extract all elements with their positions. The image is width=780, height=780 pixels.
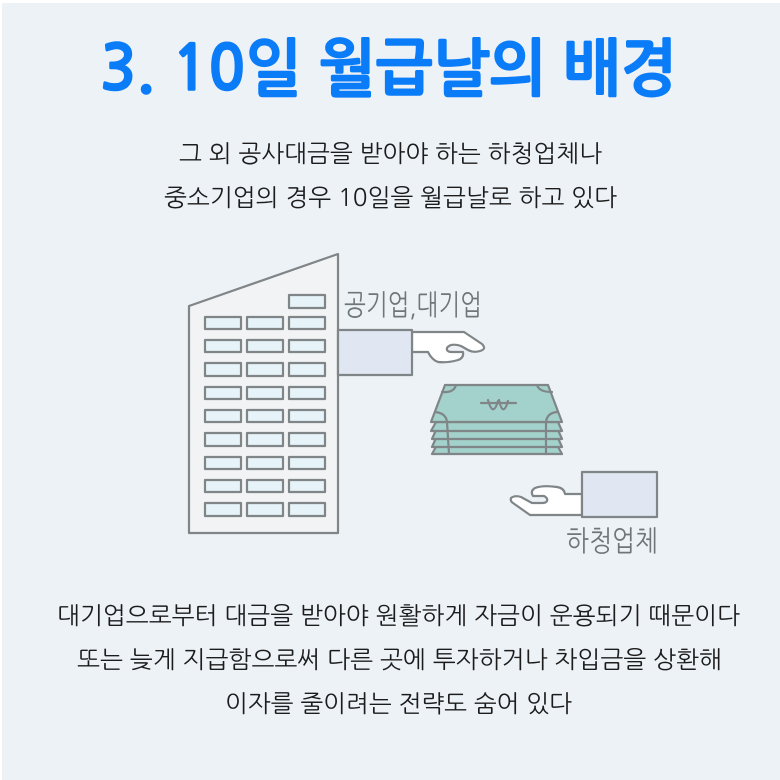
intro text: 그 외 공사대금을 받아야 하는 하청업체나 [179,141,602,166]
title: 3. 10일 월급날의 배경 [100,37,677,100]
icon: office building [189,254,338,533]
closing text: 이자를 줄이려는 전략도 숨어 있다 [225,692,572,716]
label: 하청업체: 하청업체 [566,526,658,555]
intro text [164,141,617,210]
icon: stack of won banknotes [431,385,562,454]
label: 공기업, 대기업: 공기업,대기업 [344,290,482,319]
closing text: 또는 늦게 지급함으로써 다른 곳에 투자하거나 차입금을 상환해 [77,647,722,672]
intro text: 중소기업의 경우 10일을 월급날로 하고 있다 [164,185,617,210]
closing text [57,603,740,716]
closing text: 대기업으로부터 대금을 받아야 원활하게 자금이 운용되기 때문이다 [57,603,740,628]
icon: giving hand [338,330,484,375]
building windows [205,295,325,516]
banknote corner marks [435,385,557,454]
icon: receiving hand [511,472,657,517]
